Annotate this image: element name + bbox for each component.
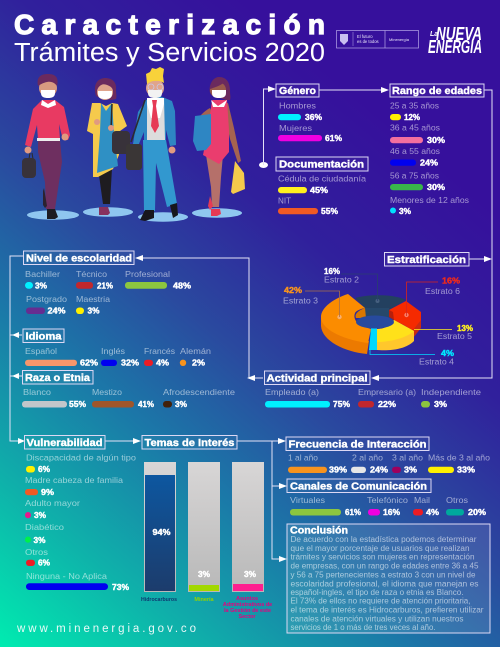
stat: 2 al año 24%: 24% <box>370 464 389 474</box>
bar: Minería 3%: 3% <box>198 569 211 579</box>
logo: La Nueva Energía <box>428 24 482 57</box>
stat: Más de 3 al año 33% <box>428 453 490 474</box>
bar: Asuntos Administrativos 3% <box>223 462 272 620</box>
bar: Hidrocarburos 94%: 94% <box>152 527 171 537</box>
text block: conclusion body: canales de atención virtuales y utilizan nuestros <box>290 614 464 623</box>
logo: government and Minenergía: es de todos <box>357 39 379 44</box>
stat: 46 a 55 años 24% <box>390 146 440 168</box>
callout: Estrato 2 16%: 16% <box>324 266 341 276</box>
stat: Mujeres 61%: Mujeres <box>279 123 312 133</box>
stat: 25 a 35 años 12%: 25 a 35 años <box>390 100 439 110</box>
stat: Adulto mayor 3% <box>25 498 80 520</box>
stat: Cédula de ciudadanía 45%: 45% <box>310 185 329 195</box>
callout: Estrato 4 4%: Estrato 4 <box>419 356 454 366</box>
text block: conclusion body: español-ingles, el tipo de raza o etnia es Blanco. <box>290 588 464 597</box>
panel: rango de edades <box>390 84 484 216</box>
stat: Español 62%: 62% <box>80 358 99 368</box>
stat: Mestizo 41%: Mestizo <box>92 387 122 397</box>
bar: Hidrocarburos 94%: Hidrocarburos <box>141 597 177 603</box>
title: Trámites y Servicios 2020 <box>14 39 325 67</box>
stat: Blanco 55% <box>22 387 87 409</box>
stat: Virtuales 61% <box>290 495 362 517</box>
heading: Conclusión: Conclusión <box>290 524 348 536</box>
stat: Inglés 32%: Inglés <box>101 346 125 356</box>
stat: Otros 20%: 20% <box>468 507 487 517</box>
stat: Más de 3 al año 33%: Más de 3 al año <box>428 453 490 463</box>
stat: Inglés 32% <box>101 346 140 368</box>
stat: Discapacidad de algún tipo 6% <box>26 452 136 474</box>
stat: Profesional 48% <box>125 269 192 290</box>
stat: Postgrado 24% <box>26 294 67 316</box>
stat: Francés 4% <box>144 346 175 368</box>
callout: Estrato 4 4% <box>370 348 455 366</box>
stat: Francés 4%: Francés <box>144 346 175 356</box>
stat: Mail 4%: Mail <box>414 495 430 505</box>
stat: Otros 6%: 6% <box>38 558 51 568</box>
heading: Rango de edades: Rango de edades <box>392 85 482 97</box>
stat: Hombres 36% <box>278 100 323 122</box>
website url: www.minenergia.gov.co <box>16 623 196 635</box>
stat: 2 al año 24%: 2 al año <box>352 453 383 463</box>
stat: Madre cabeza de familia 9%: 9% <box>41 487 55 497</box>
panel: temas de interés <box>141 436 272 620</box>
stat: Mestizo 41% <box>92 387 155 409</box>
stat: Empresario (a) 22% <box>358 387 416 409</box>
stat: Empresario (a) 22%: 22% <box>378 399 397 409</box>
stat: Hombres 36%: Hombres <box>279 100 316 110</box>
heading: Frecuencia de Interacción: Frecuencia de Interacción <box>288 438 426 450</box>
stat: 56 a 75 años 30%: 30% <box>427 182 446 192</box>
text block: conclusion body: de empresas, con un rango de edades entre 36 a 45 <box>290 562 479 571</box>
stat: Postgrado 24%: 24% <box>48 306 66 316</box>
heading: Estratificación: Estratificación <box>387 254 466 266</box>
stat: Hombres 36%: 36% <box>305 112 323 122</box>
stat: Ninguna - No Aplica 73% <box>26 571 130 592</box>
stat: 1 al año 39%: 39% <box>329 464 348 474</box>
bar: Asuntos Administrativos 3%: 3% <box>244 569 257 579</box>
stat: Técnico 21%: Técnico <box>76 269 107 279</box>
bar: Hidrocarburos 94% <box>141 462 177 603</box>
stat: Alemán 2%: 2% <box>192 358 206 368</box>
heading: Temas de Interés: Temas de Interés <box>144 437 235 449</box>
person 3 <box>126 67 188 222</box>
text block: conclusion body: servicios de 1 o más de tres veces al año. <box>290 623 436 632</box>
stat: Empleado (a) 75%: 75% <box>333 399 351 409</box>
stat: Ninguna - No Aplica 73%: Ninguna - No Aplica <box>26 571 107 581</box>
heading: Nivel de escolaridad: Nivel de escolaridad <box>26 252 132 264</box>
callout: Estrato 5 13%: 13% <box>457 323 474 333</box>
callout: Estrato 3 42%: 42% <box>284 285 303 295</box>
stat: 36 a 45 años 30%: 36 a 45 años <box>390 122 440 132</box>
stat: Adulto mayor 3%: 3% <box>34 510 47 520</box>
stat: Madre cabeza de familia 9%: Madre cabeza de familia <box>25 475 123 485</box>
stat: Virtuales 61%: Virtuales <box>290 495 325 505</box>
stat: 3 al año 3%: 3 al año <box>392 453 423 463</box>
stat: Independiente 3%: Independiente <box>421 387 481 397</box>
stat: NIT 55% <box>278 196 339 216</box>
stat: Alemán 2%: Alemán <box>180 346 211 356</box>
stat: Bachiller 3%: 3% <box>35 280 48 290</box>
stat: Afrodescendiente 3% <box>163 387 235 409</box>
stat: Afrodescendiente 3%: Afrodescendiente <box>163 387 235 397</box>
stat: Independiente 3%: 3% <box>434 399 448 409</box>
stat: Inglés 32%: 32% <box>121 358 140 368</box>
bar: Minería 3%: Minería <box>194 597 215 603</box>
panel: idioma <box>23 329 211 368</box>
stat: Blanco 55%: Blanco <box>23 387 51 397</box>
logo: La Nueva Energía: La <box>430 31 438 38</box>
stat: Blanco 55%: 55% <box>69 399 87 409</box>
stat: Menores de 12 años 3%: 3% <box>399 206 412 216</box>
person 1 <box>22 74 79 220</box>
stat: Técnico 21%: 21% <box>97 280 114 290</box>
stat: 2 al año 24% <box>351 453 389 474</box>
stat: Mail 4%: 4% <box>426 507 440 517</box>
stat: Alemán 2% <box>180 346 211 368</box>
panel: género <box>276 84 343 143</box>
callout: Estrato 4 4%: 4% <box>441 348 455 358</box>
stat: 46 a 55 años 24%: 24% <box>420 158 439 168</box>
text block: conclusion body: trámites y servicios son mujeres en representación <box>290 553 474 562</box>
stat: Mujeres 61%: 61% <box>325 133 343 143</box>
text block: conclusion body: El 73% de ellos no requiere de atención prioritaria, <box>290 597 470 606</box>
stat: Otros 20% <box>446 495 487 517</box>
stat: Bachiller 3%: Bachiller <box>25 269 60 279</box>
panel: nivel de escolaridad <box>24 251 192 316</box>
callout: Estrato 6 16%: Estrato 6 <box>425 286 460 296</box>
heading: Documentación: Documentación <box>279 158 364 170</box>
stat: Telefónico 16%: Telefónico <box>367 495 408 505</box>
text block: conclusion body: el tema de interés es Hidrocarburos, prefieren utilizar <box>290 605 484 614</box>
stat: Empleado (a) 75%: Empleado (a) <box>265 387 319 397</box>
stat: Profesional 48%: Profesional <box>125 269 170 279</box>
heading: Idioma: Idioma <box>26 330 62 342</box>
stat: Español 62%: Español <box>25 346 57 356</box>
text block: conclusion body: escolaridad profesional, el idioma que manejan es <box>290 579 478 588</box>
stat: Cédula de ciudadanía 45%: Cédula de ciudadanía <box>278 174 366 184</box>
text block: conclusion body <box>290 535 484 632</box>
logo: government and Minenergía: Minenergía <box>389 37 410 42</box>
logo: La Nueva Energía: NUEVA <box>436 24 482 44</box>
bar: Asuntos Administrativos 3%: Administrativos de <box>223 602 272 608</box>
stat: 1 al año 39%: 1 al año <box>288 453 318 463</box>
panel: estratificación <box>283 252 474 366</box>
person 4 <box>192 77 245 218</box>
bar: Asuntos Administrativos 3%: Sector <box>238 614 256 620</box>
panel: actividad principal <box>264 371 481 409</box>
stat: Discapacidad de algún tipo 6%: Discapacidad de algún tipo <box>26 452 136 462</box>
heading: Actividad principal: Actividad principal <box>266 372 368 384</box>
callout: Estrato 2 16%: Estrato 2 <box>324 274 359 284</box>
stat: Empleado (a) 75% <box>265 387 351 409</box>
panel: conclusión <box>287 524 490 633</box>
stat: NIT 55%: NIT <box>278 196 292 206</box>
panel: canales de comunicación <box>287 479 487 517</box>
stat: Menores de 12 años 3% <box>390 195 469 216</box>
bar: Minería 3% <box>188 462 220 603</box>
chart: 3D donut <box>321 294 421 354</box>
illustration: four people wearing masks <box>22 67 245 222</box>
stat: 56 a 75 años 30%: 56 a 75 años <box>390 170 439 180</box>
stat: Empresario (a) 22%: Empresario (a) <box>358 387 416 397</box>
stat: Afrodescendiente 3%: 3% <box>175 399 188 409</box>
stat: Mail 4% <box>413 495 440 517</box>
stat: Mujeres 61% <box>278 123 343 143</box>
stat: Bachiller 3% <box>25 269 60 290</box>
connector arrows <box>10 86 492 562</box>
stat: Menores de 12 años 3%: Menores de 12 años <box>390 195 469 205</box>
logo: government and Minenergía <box>336 30 418 48</box>
stat: 3 al año 3% <box>392 453 423 474</box>
text block: conclusion body: y 56 a 75 pertenecientes a estrato 3 con un nivel de <box>290 570 476 579</box>
stat: Otros 6% <box>25 547 51 568</box>
panel: vulnerabilidad <box>24 436 136 592</box>
stat: Telefónico 16% <box>367 495 408 517</box>
stat: Ninguna - No Aplica 73%: 73% <box>112 582 130 592</box>
callout: Estrato 2 16% <box>324 266 378 301</box>
stat: 3 al año 3%: 3% <box>404 464 418 474</box>
stat: Mestizo 41%: 41% <box>138 399 155 409</box>
panel: raza o etnia <box>22 370 235 409</box>
callout: Estrato 3 42%: Estrato 3 <box>283 296 318 306</box>
heading: Raza o Etnia: Raza o Etnia <box>25 372 90 384</box>
stat: Discapacidad de algún tipo 6%: 6% <box>38 464 51 474</box>
stat: Telefónico 16%: 16% <box>383 507 401 517</box>
stat: Postgrado 24%: Postgrado <box>26 294 67 304</box>
stat: Madre cabeza de familia 9% <box>25 475 123 497</box>
stat: Profesional 48%: 48% <box>173 280 192 290</box>
title <box>14 9 325 67</box>
stat: Cédula de ciudadanía 45% <box>278 174 366 195</box>
stat: Independiente 3% <box>421 387 481 409</box>
callout: Estrato 5 13%: Estrato 5 <box>437 331 472 341</box>
stat: 25 a 35 años 12%: 12% <box>404 112 421 122</box>
stat: Diabético 3%: Diabético <box>25 522 64 532</box>
logo: government and Minenergía: El futuro <box>357 34 373 39</box>
text block: conclusion body: que el mayor porcentaje de usuarios que realizan <box>290 544 470 553</box>
heading: Canales de Comunicación: Canales de Comunicación <box>290 480 427 492</box>
stat: 46 a 55 años 24%: 46 a 55 años <box>390 146 440 156</box>
stat: Adulto mayor 3%: Adulto mayor <box>25 498 80 508</box>
stat: Más de 3 al año 33%: 33% <box>457 464 476 474</box>
stat: Francés 4%: 4% <box>156 358 170 368</box>
stat: 25 a 35 años 12% <box>390 100 439 122</box>
bar: Asuntos Administrativos 3%: la Gestión de este <box>224 608 271 614</box>
bar: Asuntos Administrativos 3%: Asuntos <box>236 596 258 602</box>
callout: Estrato 6 16%: 16% <box>442 276 461 286</box>
text block: conclusion body: De acuerdo con la estadística podemos determinar <box>290 535 477 544</box>
stat: Maestria 3% <box>76 294 110 316</box>
callout: Estrato 3 42% <box>283 285 340 317</box>
stat: Otros 20%: Otros <box>446 495 468 505</box>
stat: 36 a 45 años 30% <box>390 122 446 145</box>
stat: 36 a 45 años 30%: 30% <box>427 135 446 145</box>
stat: Virtuales 61%: 61% <box>345 507 362 517</box>
heading: Vulnerabilidad: Vulnerabilidad <box>26 437 102 449</box>
panel: frecuencia de interacción <box>286 437 490 474</box>
callout: Estrato 5 13% <box>414 323 474 341</box>
heading: Género: Género <box>279 85 316 97</box>
stat: Maestria 3%: 3% <box>88 306 100 316</box>
stat: Técnico 21% <box>76 269 114 290</box>
stat: 56 a 75 años 30% <box>390 170 446 192</box>
stat: Otros 6%: Otros <box>25 547 48 557</box>
stat: NIT 55%: 55% <box>321 206 339 216</box>
callout: Estrato 6 16% <box>406 276 461 316</box>
stat: Diabético 3%: 3% <box>34 535 46 545</box>
stat: 1 al año 39% <box>288 453 348 474</box>
panel: documentación <box>276 157 368 216</box>
stat: Diabético 3% <box>25 522 64 545</box>
person 2 <box>83 78 133 217</box>
stat: Español 62% <box>25 346 99 368</box>
stat: Maestria 3%: Maestria <box>76 294 110 304</box>
title: Caracterización <box>14 9 325 40</box>
